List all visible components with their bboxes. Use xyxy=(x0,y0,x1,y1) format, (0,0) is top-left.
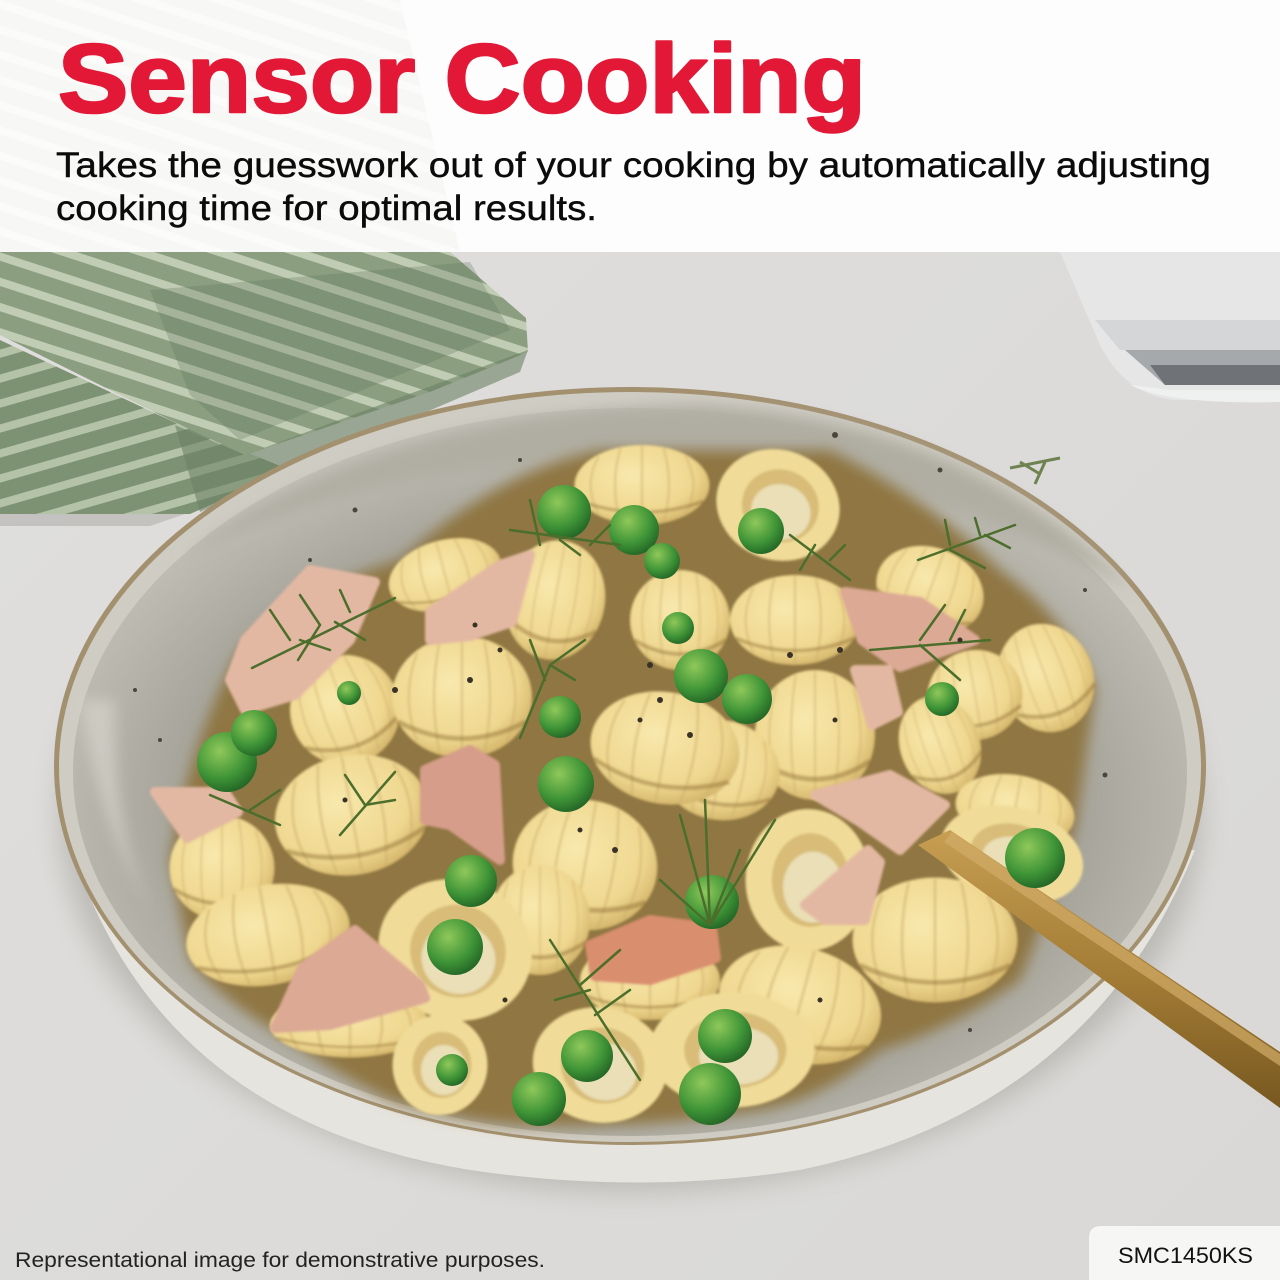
salmon flakes xyxy=(155,555,975,1028)
model number tag: SMC1450KS xyxy=(1118,1243,1253,1268)
dill sprig behind bowl xyxy=(1010,458,1060,484)
water glass xyxy=(1060,252,1280,402)
translucent white header band xyxy=(0,0,1280,252)
green peas xyxy=(197,485,1065,1126)
title: Sensor Cooking xyxy=(58,24,866,133)
orecchiette pasta shells xyxy=(170,432,1109,1133)
subtitle: cooking time for optimal results. xyxy=(56,189,597,228)
napkin: green striped cloth xyxy=(0,0,528,526)
pasta pile base xyxy=(170,450,1095,1126)
dill sprigs xyxy=(210,500,1015,1080)
subtitle xyxy=(56,146,1211,228)
bowl xyxy=(54,387,1206,1190)
disclaimer note: Representational image for demonstrative purposes. xyxy=(15,1249,545,1272)
gold fork xyxy=(918,830,1280,1108)
subtitle: Takes the guesswork out of your cooking by automatically adjusting xyxy=(56,146,1211,185)
model number tag xyxy=(1089,1226,1280,1280)
cracked pepper specks xyxy=(342,622,962,1002)
